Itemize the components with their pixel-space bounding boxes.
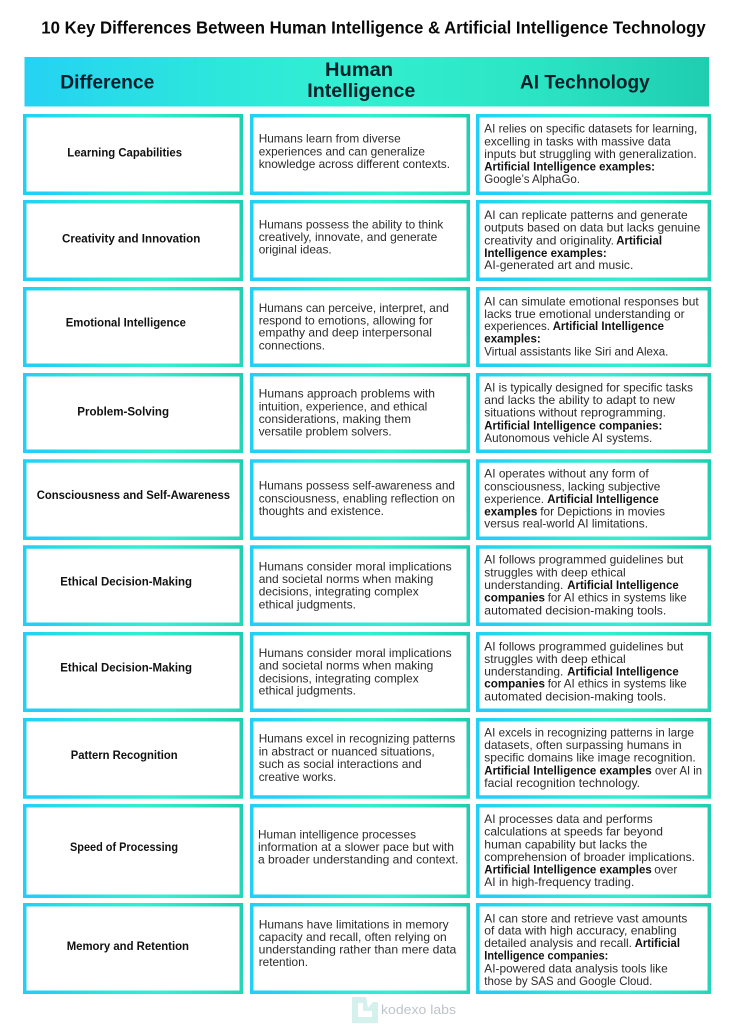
AI technology cell: AI follows programmed guidelines but bbox=[484, 553, 684, 567]
AI technology cell: Artificial Intelligence examples bbox=[484, 763, 652, 777]
human intelligence cell: Humans excel in recognizing patterns bbox=[259, 732, 455, 746]
human intelligence cell: experiences and can generalize bbox=[259, 144, 425, 158]
AI technology cell: Artificial Intelligence bbox=[567, 578, 679, 592]
human intelligence cell: a broader understanding and context. bbox=[258, 853, 458, 867]
difference cell bbox=[25, 720, 241, 797]
human intelligence cell bbox=[252, 547, 468, 624]
AI technology cell: examples: bbox=[484, 332, 541, 346]
human intelligence cell: connections. bbox=[259, 338, 325, 352]
AI technology cell: for AI ethics in systems like bbox=[548, 677, 687, 691]
AI technology cell bbox=[478, 202, 709, 279]
logo text: kodexo labs bbox=[381, 1002, 457, 1017]
header: human intelligence: Human bbox=[325, 60, 393, 81]
row 2: creativity and innovation bbox=[25, 202, 709, 279]
row 4: problem-solving bbox=[25, 375, 709, 451]
difference cell bbox=[25, 634, 241, 710]
header: AI technology: AI Technology bbox=[520, 72, 650, 94]
AI technology cell: inputs but struggling with generalization. bbox=[484, 147, 697, 161]
human intelligence cell: Humans can perceive, interpret, and bbox=[259, 301, 449, 315]
human intelligence cell: knowledge across different contexts. bbox=[259, 157, 450, 171]
difference cell: Ethical Decision-Making bbox=[60, 660, 192, 674]
AI technology cell: creativity and originality. bbox=[484, 233, 614, 247]
difference cell: Problem-Solving bbox=[77, 404, 169, 418]
AI technology cell: Virtual assistants like Siri and Alexa. bbox=[484, 344, 668, 358]
difference cell: Creativity and Innovation bbox=[62, 232, 200, 246]
difference cell bbox=[25, 116, 241, 193]
AI technology cell: lacks true emotional understanding or bbox=[484, 307, 685, 321]
human intelligence cell: considerations, making them bbox=[259, 412, 411, 426]
AI technology cell: Artificial bbox=[616, 233, 662, 247]
human intelligence cell bbox=[252, 634, 468, 710]
AI technology cell: AI can simulate emotional responses but bbox=[484, 294, 699, 308]
AI technology cell: Artificial Intelligence examples: bbox=[484, 159, 655, 173]
AI technology cell bbox=[478, 806, 709, 896]
row 1: learning capabilities bbox=[25, 116, 709, 193]
AI technology cell: Artificial Intelligence companies: bbox=[484, 418, 662, 432]
AI technology cell: facial recognition technology. bbox=[484, 776, 640, 790]
difference cell: Learning Capabilities bbox=[67, 146, 182, 160]
difference cell bbox=[25, 547, 241, 624]
AI technology cell: detailed analysis and recall. bbox=[484, 936, 632, 950]
human intelligence cell bbox=[252, 806, 468, 896]
human intelligence cell: retention. bbox=[259, 955, 308, 969]
row 3: emotional intelligence bbox=[25, 289, 709, 365]
icon: kodexo mark bbox=[352, 997, 378, 1023]
human intelligence cell: such as social interactions and bbox=[259, 757, 422, 771]
AI technology cell: companies bbox=[484, 591, 545, 605]
human intelligence cell: and societal norms when making bbox=[259, 572, 433, 586]
human intelligence cell: ethical judgments. bbox=[259, 683, 356, 697]
human intelligence cell: Humans consider moral implications bbox=[259, 559, 452, 573]
difference cell: Pattern Recognition bbox=[71, 748, 178, 762]
AI technology cell bbox=[478, 461, 709, 538]
title: 10 Key Differences Between Human Intelligence & Artificial Intelligence Technology bbox=[41, 18, 706, 38]
AI technology cell: human capability but lacks the bbox=[484, 837, 648, 851]
human intelligence cell: understanding rather than mere data bbox=[259, 943, 457, 957]
row 8: pattern recognition bbox=[25, 720, 709, 797]
AI technology cell bbox=[478, 720, 709, 797]
AI technology cell: Artificial Intelligence examples bbox=[484, 863, 652, 877]
AI technology cell: for AI ethics in systems like bbox=[548, 591, 687, 605]
human intelligence cell: Humans learn from diverse bbox=[259, 132, 401, 146]
row 10: memory and retention bbox=[25, 905, 709, 992]
header: difference: Difference bbox=[60, 72, 154, 94]
AI technology cell: AI in high-frequency trading. bbox=[484, 875, 634, 889]
AI technology cell: struggles with deep ethical bbox=[484, 565, 626, 579]
header: human intelligence bbox=[307, 60, 415, 102]
human intelligence cell: information at a slower pace but with bbox=[258, 840, 454, 854]
row 6: ethical decision-making bbox=[25, 547, 709, 624]
AI technology cell: Intelligence examples: bbox=[484, 246, 607, 260]
human intelligence cell bbox=[252, 375, 468, 451]
human intelligence cell bbox=[252, 461, 468, 538]
row 9: speed of processing bbox=[25, 806, 709, 896]
AI technology cell bbox=[478, 634, 709, 710]
human intelligence cell: capacity and recall, often relying on bbox=[259, 930, 447, 944]
difference cell bbox=[25, 289, 241, 365]
difference cell bbox=[25, 806, 241, 896]
AI technology cell: Artificial Intelligence bbox=[553, 319, 664, 333]
AI technology cell: experience. bbox=[484, 492, 544, 506]
AI technology cell: automated decision-making tools. bbox=[484, 603, 666, 617]
human intelligence cell: intuition, experience, and ethical bbox=[259, 399, 427, 413]
difference cell bbox=[25, 461, 241, 538]
AI technology cell: for Depictions in movies bbox=[540, 504, 665, 518]
AI technology cell: situations without reprogramming. bbox=[484, 406, 666, 420]
header: human intelligence: Intelligence bbox=[307, 81, 415, 102]
AI technology cell: AI-generated art and music. bbox=[484, 258, 633, 272]
AI technology cell: over AI in bbox=[655, 763, 702, 777]
difference cell bbox=[25, 905, 241, 992]
header background bbox=[24, 57, 709, 106]
human intelligence cell: creative works. bbox=[259, 770, 336, 784]
difference cell: Emotional Intelligence bbox=[66, 316, 186, 330]
human intelligence cell: in abstract or nuanced situations, bbox=[259, 744, 435, 758]
human intelligence cell bbox=[252, 202, 468, 279]
AI technology cell: experiences. bbox=[484, 319, 550, 333]
human intelligence cell: Humans consider moral implications bbox=[259, 646, 452, 660]
human intelligence cell bbox=[252, 720, 468, 797]
human intelligence cell: Humans approach problems with bbox=[259, 387, 435, 401]
difference cell bbox=[25, 375, 241, 451]
AI technology cell bbox=[478, 289, 709, 365]
logo: kodexo labs watermark bbox=[352, 997, 457, 1023]
human intelligence cell: creatively, innovate, and generate bbox=[259, 230, 438, 244]
human intelligence cell bbox=[252, 116, 468, 193]
AI technology cell bbox=[478, 116, 709, 193]
AI technology cell: Google’s AlphaGo. bbox=[484, 172, 580, 186]
AI technology cell: those by SAS and Google Cloud. bbox=[484, 974, 652, 988]
row 7: ethical decision-making (repeat) bbox=[25, 634, 709, 710]
AI technology cell: AI-powered data analysis tools like bbox=[484, 961, 668, 975]
AI technology cell: versus real-world AI limitations. bbox=[484, 517, 648, 531]
AI technology cell: AI can replicate patterns and generate bbox=[484, 208, 688, 222]
difference cell: Consciousness and Self-Awareness bbox=[37, 488, 230, 502]
human intelligence cell: empathy and deep interpersonal bbox=[259, 326, 432, 340]
human intelligence cell: Humans possess the ability to think bbox=[259, 217, 444, 231]
AI technology cell: companies bbox=[484, 677, 545, 691]
AI technology cell: outputs based on data but lacks genuine bbox=[484, 221, 701, 235]
AI technology cell: Intelligence companies: bbox=[484, 949, 608, 963]
table header bbox=[24, 57, 709, 106]
AI technology cell: Artificial Intelligence bbox=[547, 492, 659, 506]
difference cell: Speed of Processing bbox=[70, 840, 178, 854]
row 5: consciousness and self-awareness bbox=[25, 461, 709, 538]
human intelligence cell: versatile problem solvers. bbox=[259, 425, 392, 439]
AI technology cell: AI is typically designed for specific tasks bbox=[484, 380, 693, 394]
human intelligence cell: decisions, integrating complex bbox=[259, 671, 419, 685]
human intelligence cell: thoughts and existence. bbox=[259, 504, 384, 518]
AI technology cell bbox=[478, 905, 709, 992]
AI technology cell: comprehension of broader implications. bbox=[484, 850, 695, 864]
AI technology cell: Autonomous vehicle AI systems. bbox=[484, 431, 652, 445]
AI technology cell: struggles with deep ethical bbox=[484, 652, 626, 666]
AI technology cell: AI processes data and performs bbox=[484, 812, 653, 826]
AI technology cell: AI follows programmed guidelines but bbox=[484, 639, 684, 653]
AI technology cell: datasets, often surpassing humans in bbox=[484, 738, 682, 752]
AI technology cell: and lacks the ability to adapt to new bbox=[484, 393, 675, 407]
AI technology cell bbox=[478, 547, 709, 624]
human intelligence cell: Humans possess self-awareness and bbox=[259, 479, 455, 493]
AI technology cell: automated decision-making tools. bbox=[484, 689, 666, 703]
AI technology cell: calculations at speeds far beyond bbox=[484, 825, 663, 839]
human intelligence cell: Humans have limitations in memory bbox=[259, 918, 449, 932]
human intelligence cell: Human intelligence processes bbox=[258, 827, 416, 841]
AI technology cell: AI excels in recognizing patterns in large bbox=[484, 725, 694, 739]
AI technology cell: consciousness, lacking subjective bbox=[484, 479, 661, 493]
AI technology cell: AI relies on specific datasets for learning, bbox=[484, 122, 697, 136]
AI technology cell: AI can store and retrieve vast amounts bbox=[484, 911, 687, 925]
AI technology cell: Artificial bbox=[635, 936, 680, 950]
human intelligence cell: decisions, integrating complex bbox=[259, 585, 419, 599]
AI technology cell: Artificial Intelligence bbox=[567, 665, 679, 679]
difference cell: Memory and Retention bbox=[67, 939, 189, 953]
AI technology cell: specific domains like image recognition. bbox=[484, 751, 696, 765]
human intelligence cell: and societal norms when making bbox=[259, 659, 433, 673]
human intelligence cell bbox=[252, 905, 468, 992]
AI technology cell: AI operates without any form of bbox=[484, 467, 649, 481]
human intelligence cell bbox=[252, 289, 468, 365]
difference cell: Ethical Decision-Making bbox=[60, 574, 192, 588]
AI technology cell: over bbox=[654, 863, 677, 877]
human intelligence cell: consciousness, enabling reflection on bbox=[259, 491, 455, 505]
AI technology cell: of data with high accuracy, enabling bbox=[484, 923, 677, 937]
AI technology cell: understanding. bbox=[484, 665, 563, 679]
AI technology cell: understanding. bbox=[484, 578, 563, 592]
difference cell bbox=[25, 202, 241, 279]
human intelligence cell: original ideas. bbox=[259, 243, 332, 257]
human intelligence cell: respond to emotions, allowing for bbox=[259, 314, 433, 328]
AI technology cell: examples bbox=[484, 504, 538, 518]
AI technology cell bbox=[478, 375, 709, 451]
human intelligence cell: ethical judgments. bbox=[259, 597, 356, 611]
AI technology cell: excelling in tasks with massive data bbox=[484, 134, 671, 148]
